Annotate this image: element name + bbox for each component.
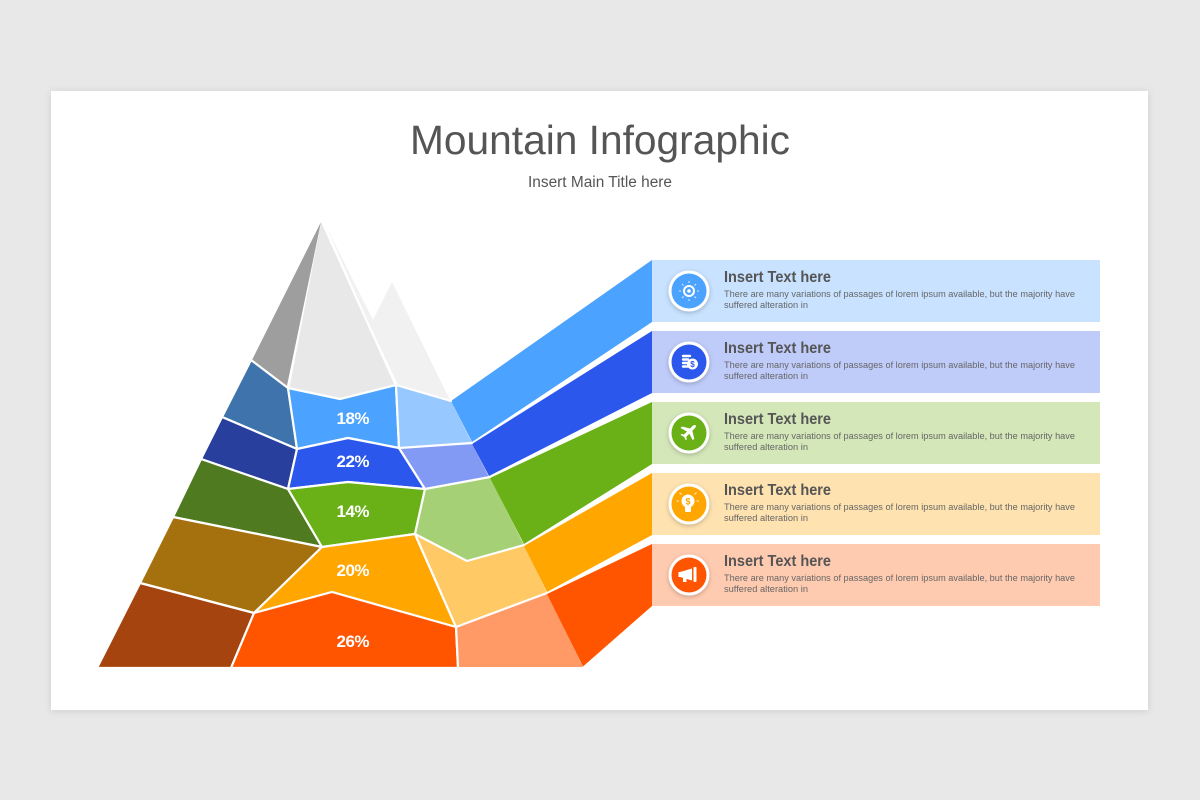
icon: coins: $: [690, 360, 695, 369]
panel: item 5: [652, 544, 1100, 606]
panel: item 5: suffered alteration in: [724, 584, 808, 595]
panel: item 3: [652, 402, 1100, 464]
side face outlines: [396, 385, 547, 667]
panel: item 1: There are many variations of passages of lorem ipsum available, but the majority have: [724, 289, 1075, 300]
icon: megaphone: [668, 554, 710, 596]
panel: item 5: There are many variations of passages of lorem ipsum available, but the majority have: [724, 573, 1075, 584]
panel: item 2: There are many variations of passages of lorem ipsum available, but the majority have: [724, 360, 1075, 371]
icon: plane: [668, 412, 710, 454]
panel: item 3: Insert Text here: [724, 411, 831, 428]
percent labels: 14%: [336, 502, 370, 521]
panel: colour bands: [451, 260, 652, 666]
panel: item 3: There are many variations of passages of lorem ipsum available, but the majority have: [724, 431, 1075, 442]
panel: item 4: There are many variations of passages of lorem ipsum available, but the majority have: [724, 502, 1075, 513]
side faces: [396, 385, 472, 448]
panel: item 1: Insert Text here: [724, 269, 831, 286]
snow cap outlines: [286, 222, 321, 388]
title: Mountain Infographic: [410, 117, 790, 163]
illustration: mountain: [97, 222, 583, 668]
panel: item 4: [652, 473, 1100, 535]
snow cap right outline: [321, 222, 398, 386]
panel: item 4: suffered alteration in: [724, 513, 808, 524]
panel: item 4: Insert Text here: [724, 482, 831, 499]
percent labels: 22%: [336, 452, 370, 471]
panel: item 2: suffered alteration in: [724, 371, 808, 382]
icon: light bulb: $: [685, 496, 691, 506]
percent labels: 26%: [336, 632, 370, 651]
front faces: [288, 385, 399, 449]
panel: item 2: [652, 331, 1100, 393]
panel: item 5: Insert Text here: [724, 553, 831, 570]
panel: item 1: suffered alteration in: [724, 300, 808, 311]
background card: [51, 91, 1148, 710]
percent labels: 20%: [336, 561, 370, 580]
subtitle: Insert Main Title here: [528, 174, 672, 191]
panel: item 2: Insert Text here: [724, 340, 831, 357]
panel: item 3: suffered alteration in: [724, 442, 808, 453]
rock face: [252, 222, 321, 388]
snow cap: [288, 222, 396, 399]
panel: item 1: [652, 260, 1100, 322]
icon: light bulb: [668, 484, 710, 524]
percent labels: 18%: [336, 409, 370, 428]
icon: coins: [668, 342, 710, 382]
percent labels: [336, 409, 370, 651]
back peak: [326, 226, 450, 400]
left faces: [222, 360, 297, 449]
icon: target: [668, 270, 710, 312]
